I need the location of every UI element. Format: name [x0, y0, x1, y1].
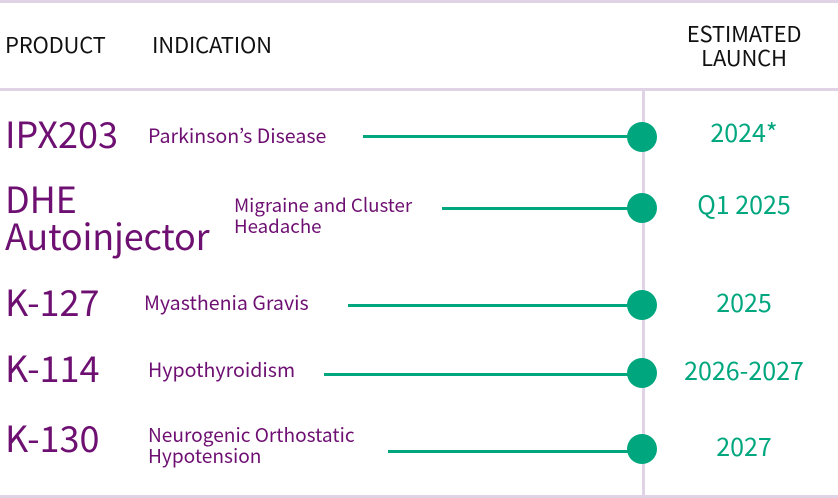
- product name: K-130: [5, 411, 100, 463]
- marker: [627, 290, 657, 320]
- product name: K-114: [5, 341, 100, 393]
- launch date: 2025: [716, 284, 772, 320]
- row: K-114: [5, 341, 804, 393]
- indication: Myasthenia Gravis: [144, 287, 309, 316]
- marker: [627, 122, 657, 152]
- row: IPX203: [5, 107, 778, 159]
- indication: Hypothyroidism: [148, 354, 295, 383]
- header row: [5, 17, 801, 73]
- indication: [148, 420, 355, 469]
- launch date: 2026-2027: [684, 352, 804, 388]
- product name: IPX203: [5, 107, 118, 159]
- indication column heading: INDICATION: [152, 28, 272, 60]
- indication: Parkinson’s Disease: [148, 120, 326, 149]
- connector line: [442, 207, 632, 210]
- connector line: [348, 304, 633, 307]
- estimated launch column heading: [687, 17, 801, 73]
- product name: DHE: [5, 172, 77, 224]
- marker: [627, 193, 657, 223]
- header divider: [0, 88, 838, 91]
- bottom border: [0, 495, 838, 498]
- product name: [5, 172, 210, 261]
- row: DHE Autoinjector: [5, 172, 791, 261]
- connector line: [324, 373, 633, 376]
- product column heading: PRODUCT: [5, 28, 106, 60]
- estimated launch column heading: ESTIMATED: [687, 17, 801, 49]
- launch date: Q1 2025: [697, 186, 791, 222]
- indication: Hypotension: [148, 441, 261, 469]
- product name: K-127: [5, 275, 100, 327]
- row: K-127: [5, 275, 772, 327]
- product name: Autoinjector: [5, 209, 209, 261]
- timeline vertical axis: [642, 91, 644, 496]
- connector line: [388, 450, 633, 453]
- top border: [0, 0, 838, 3]
- marker: [627, 434, 657, 464]
- connector line: [363, 135, 633, 138]
- row: K-130: [5, 411, 772, 469]
- indication: [234, 191, 412, 239]
- indication: Neurogenic Orthostatic: [148, 420, 355, 448]
- estimated launch column heading: LAUNCH: [701, 41, 787, 73]
- indication: Headache: [234, 212, 322, 239]
- indication: Migraine and Cluster: [234, 191, 412, 218]
- launch date: 2024*: [710, 114, 778, 150]
- marker: [627, 358, 657, 388]
- launch date: 2027: [716, 428, 772, 464]
